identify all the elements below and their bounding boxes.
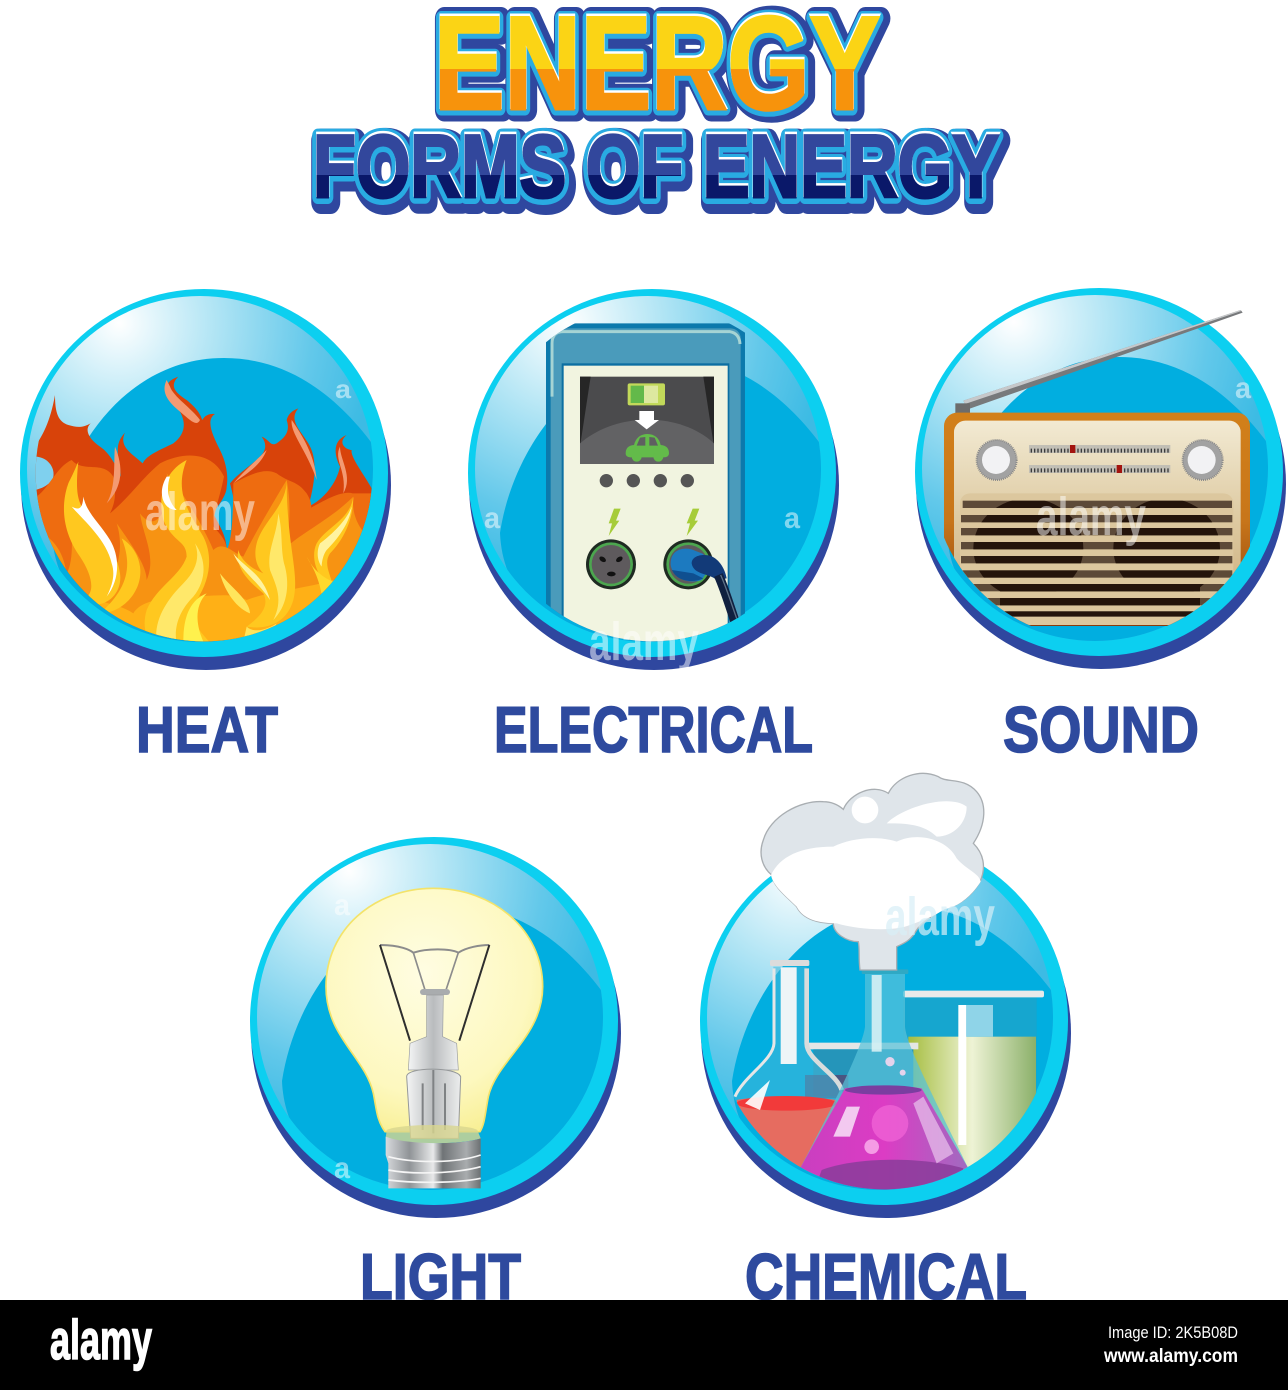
back beaker [903, 991, 1044, 1180]
title: FORMS OF ENERGY: FORMS OF ENERGY [313, 116, 999, 216]
title: FORMS OF ENERGY: FORMS OF ENERGY [313, 114, 999, 214]
watermark: alamy [885, 887, 995, 947]
icon: radio [944, 310, 1250, 626]
screw base [386, 1137, 481, 1188]
label: chemical: CHEMICAL [745, 1240, 1027, 1313]
footer bar [0, 1300, 1288, 1390]
collar [386, 1125, 481, 1143]
glass stem [407, 989, 461, 1138]
conical flask [800, 969, 968, 1193]
watermarks: alamy [1036, 487, 1146, 547]
panel: electrical: a [784, 502, 800, 535]
panel: electrical: alamy [589, 612, 699, 672]
label: sound: SOUND [1003, 693, 1199, 766]
speaker grille [960, 493, 1233, 625]
icon: EV charging station [546, 323, 745, 666]
panel: electrical [468, 289, 839, 672]
label: electrical: ELECTRICAL [494, 693, 813, 766]
red flask [734, 960, 844, 1183]
panel: chemical [700, 773, 1071, 1218]
panel: sound [915, 288, 1286, 669]
panel: heat [20, 289, 391, 670]
smoke cloud [761, 773, 984, 970]
icon: flames [33, 377, 375, 647]
icon: light bulb [326, 888, 543, 1188]
website: www.alamy.com [1103, 1346, 1238, 1367]
title: FORMS OF ENERGY: FORMS OF ENERGY [316, 121, 1002, 221]
icon: laboratory glassware [723, 773, 1044, 1193]
label: light: LIGHT [360, 1240, 521, 1313]
watermarks: a [484, 502, 500, 535]
filament [380, 945, 489, 1041]
watermark: alamy [145, 482, 255, 542]
tuning knobs [977, 440, 1223, 480]
panel: light [250, 837, 621, 1218]
small beaker [805, 1043, 918, 1098]
label: heat: HEAT [136, 693, 278, 766]
panel: heat: a [335, 374, 352, 404]
socket left [586, 539, 636, 589]
image id: Image ID: 2K5B08D [1108, 1323, 1238, 1342]
screen [580, 377, 714, 464]
socket right with plug and cable [663, 539, 737, 622]
panel: sound: a [1235, 372, 1251, 405]
footer logo: alamy [50, 1308, 152, 1371]
watermarks: a [334, 889, 350, 922]
panel: light: a [334, 1152, 350, 1185]
dials [1029, 445, 1170, 473]
antenna [955, 310, 1243, 414]
title: FORMS OF ENERGY: FORMS OF ENERGY [313, 116, 999, 216]
